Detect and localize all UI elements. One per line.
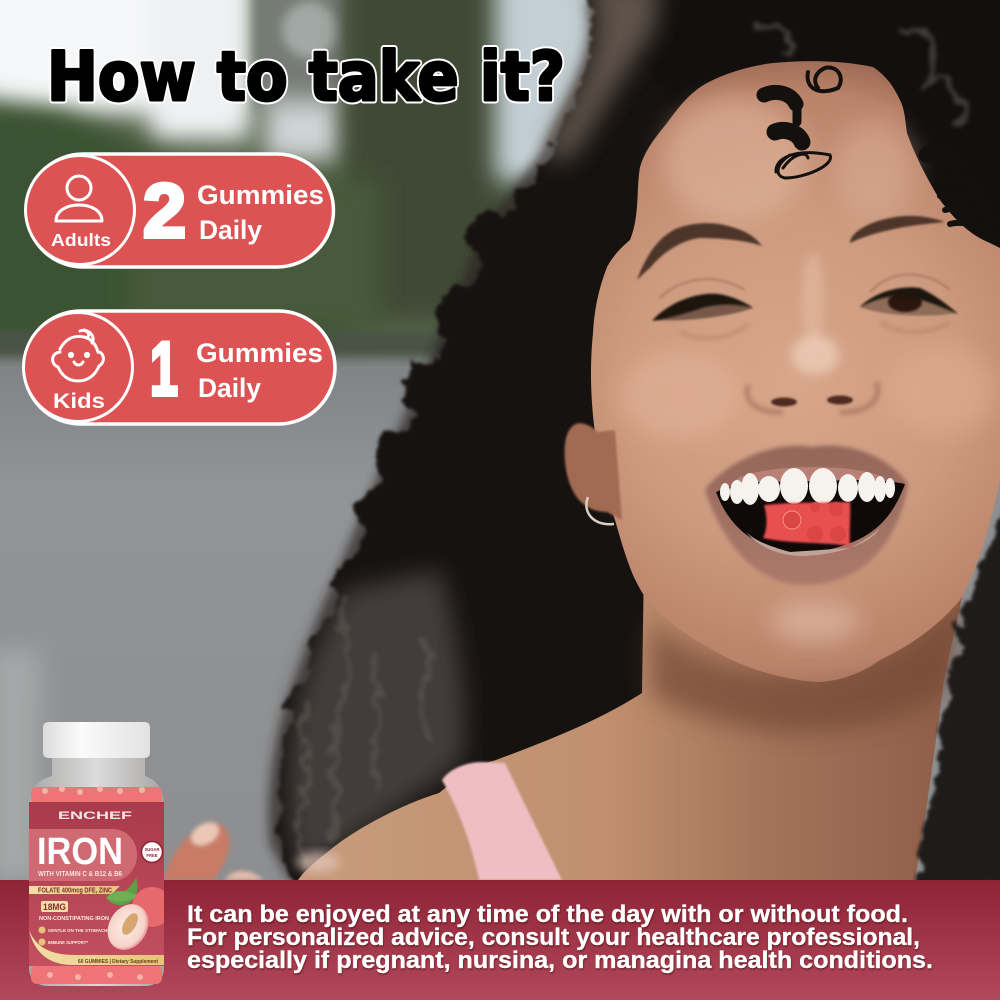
title: How to take it? [47,38,565,117]
claims: IMMUNE SUPPORT* [48,940,88,945]
woman: right side hair [915,470,1000,885]
bottle label [29,802,164,966]
advice text: For personalized advice, consult your healthcare professional, [187,924,920,951]
woman: nose [747,252,878,412]
folate strip [29,886,120,894]
pink strap [442,762,562,880]
18MG tag [41,901,68,912]
dose number 2: 2 [143,169,186,254]
gummy bear in mouth [763,502,850,546]
IRON heading [29,829,137,881]
dose text [197,180,324,245]
panel: kids dosage pill [24,311,335,424]
gums [735,467,885,495]
bottle glass [29,758,164,986]
hair strands [298,23,965,865]
woman: hair mass [269,0,1000,882]
dose text: Daily [198,373,261,403]
panel: adults dosage pill [26,154,334,267]
mouth opening [716,480,905,553]
product bottle [29,722,172,986]
claims [38,916,109,946]
brand logo: ENCHEF [58,810,132,822]
woman: face [591,61,1000,682]
advice text: especially if pregnant, nursina, or managina health conditions. [187,947,933,974]
greyish outer curls [288,570,464,872]
icon: adult person [56,176,102,221]
dose text: Gummies [197,180,324,210]
product bottle: 18MG [43,902,66,912]
product bottle: FREE [146,853,158,858]
woman: eyes [652,274,958,338]
claims: GENTLE ON THE STOMACH* [48,928,109,933]
lid creases [660,274,950,298]
dose number 1: 1 [150,327,178,412]
centre curl [764,92,796,104]
product bottle: WITH VITAMIN C & B12 & B6 [38,871,122,878]
label: kids: Kids [53,390,105,413]
brown blurred fringe [548,0,660,162]
product bottle: 60 GUMMIES | Dietary Supplement [78,959,158,965]
dose text: Gummies [196,338,323,368]
icon: baby face [53,330,103,381]
sugar free badge [142,842,162,862]
label: adults: Adults [51,230,111,250]
product bottle: SUGAR [144,847,160,852]
woman: eyebrows [637,216,945,280]
woman: shoulders, neck and pink top [296,560,970,880]
bottle cap [43,722,150,758]
bottom advice band [0,880,1000,1000]
dose text: Daily [199,215,262,245]
peach illustration [106,877,164,950]
teeth [720,468,895,505]
dose text [196,338,323,403]
gummies in the bottle [31,787,162,984]
advice text: It can be enjoyed at any time of the day with or without food. [187,901,908,928]
title: How to take it? [47,38,565,117]
product bottle: FOLATE 400mcg DFE, ZINC [38,888,112,894]
gold swoosh and product strip [29,930,164,965]
woman: forehead curls [764,68,1000,238]
right coil [926,152,955,165]
woman: ear and earring [565,423,622,524]
product bottle: IRON [37,831,123,873]
advice text [187,901,933,974]
lips [705,445,908,585]
blurred fingertip [164,818,264,880]
claims: NON-CONSTIPATING IRON [39,916,109,922]
woman: smile [705,445,908,585]
